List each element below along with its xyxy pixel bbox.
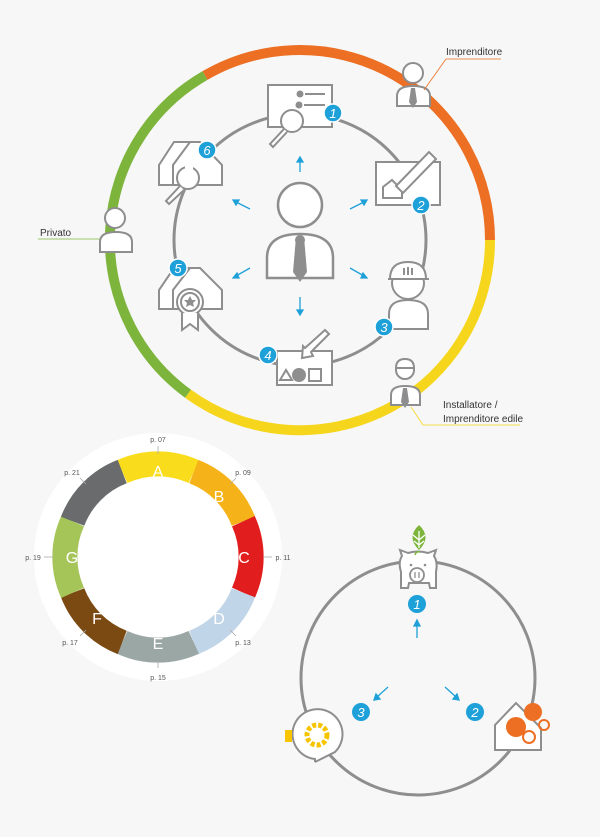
panel: process cycle: 5 bbox=[174, 261, 182, 276]
panel: chapters donut: E bbox=[153, 636, 163, 653]
inner gray circle bbox=[174, 114, 426, 366]
panel: process cycle: 4 bbox=[264, 348, 272, 363]
panel: chapters donut: B bbox=[214, 489, 224, 506]
panel: chapters donut: p. 21 bbox=[64, 470, 80, 477]
label: Installatore / Imprenditore edile: Imprenditore edile bbox=[443, 414, 523, 425]
icon 1: document with magnifier bbox=[268, 85, 332, 147]
G bbox=[65, 521, 73, 593]
B bbox=[194, 472, 243, 521]
badges: step numbers bbox=[169, 104, 430, 364]
A bbox=[122, 464, 194, 472]
panel: chapters donut: p. 15 bbox=[150, 675, 166, 682]
C bbox=[243, 521, 251, 593]
panel: process cycle bbox=[38, 47, 523, 430]
label: Imprenditore: Imprenditore bbox=[446, 47, 503, 58]
icon 3: worker bbox=[388, 262, 429, 329]
panel: chapters donut: C bbox=[238, 550, 250, 567]
icon 2: drawing with pencil bbox=[376, 152, 440, 205]
panel: savings cycle: 1 bbox=[413, 597, 421, 612]
panel: chapters donut: D bbox=[213, 611, 225, 628]
icon 6: house with wrench bbox=[159, 142, 222, 204]
panel: chapters donut: p. 13 bbox=[235, 640, 251, 647]
F bbox=[73, 593, 122, 642]
panel: chapters donut: p. 09 bbox=[235, 470, 251, 477]
panel: chapters donut: G bbox=[66, 550, 78, 567]
outer ring: orange bbox=[205, 50, 490, 240]
icon: piggy bank with leaf bbox=[400, 525, 437, 588]
panel: chapters donut bbox=[25, 433, 291, 682]
icon: central person bbox=[267, 183, 333, 282]
icon: orange house butterfly bbox=[495, 703, 549, 750]
panel: chapters donut: p. 11 bbox=[275, 555, 291, 562]
panel: chapters donut: F bbox=[92, 611, 102, 628]
person: Installatore bbox=[391, 359, 420, 408]
outer ring: green bbox=[110, 76, 205, 394]
panel: process cycle: 3 bbox=[380, 320, 388, 335]
panel: savings cycle bbox=[285, 525, 549, 795]
icon: plug and flower bbox=[285, 709, 343, 762]
label: Installatore / Imprenditore edile bbox=[411, 400, 523, 425]
label: Installatore / Imprenditore edile: Installatore / bbox=[443, 400, 498, 411]
E bbox=[122, 642, 194, 650]
label: Privato: Privato bbox=[40, 228, 72, 239]
panel: chapters donut: p. 17 bbox=[62, 640, 78, 647]
gray bbox=[73, 472, 122, 521]
panel: process cycle: 6 bbox=[203, 143, 211, 158]
panel: savings cycle: 2 bbox=[470, 705, 479, 720]
panel: chapters donut: A bbox=[153, 464, 164, 481]
panel: process cycle: 2 bbox=[416, 198, 425, 213]
D bbox=[194, 593, 243, 642]
label: Imprenditore bbox=[424, 47, 503, 90]
panel: chapters donut: p. 07 bbox=[150, 437, 166, 444]
person: Imprenditore bbox=[397, 63, 430, 108]
panel: savings cycle: 3 bbox=[357, 705, 365, 720]
panel: chapters donut: p. 19 bbox=[25, 555, 41, 562]
outer ring: yellow bbox=[188, 240, 490, 430]
icon 5: house with medal bbox=[159, 268, 222, 330]
badges bbox=[352, 595, 484, 721]
arrows bbox=[374, 620, 459, 700]
icon 4: box with shapes bbox=[277, 330, 332, 385]
label: Privato bbox=[38, 228, 100, 239]
person: Privato bbox=[100, 208, 132, 252]
arrows: blue radial bbox=[233, 157, 367, 315]
panel: process cycle: 1 bbox=[329, 106, 337, 121]
